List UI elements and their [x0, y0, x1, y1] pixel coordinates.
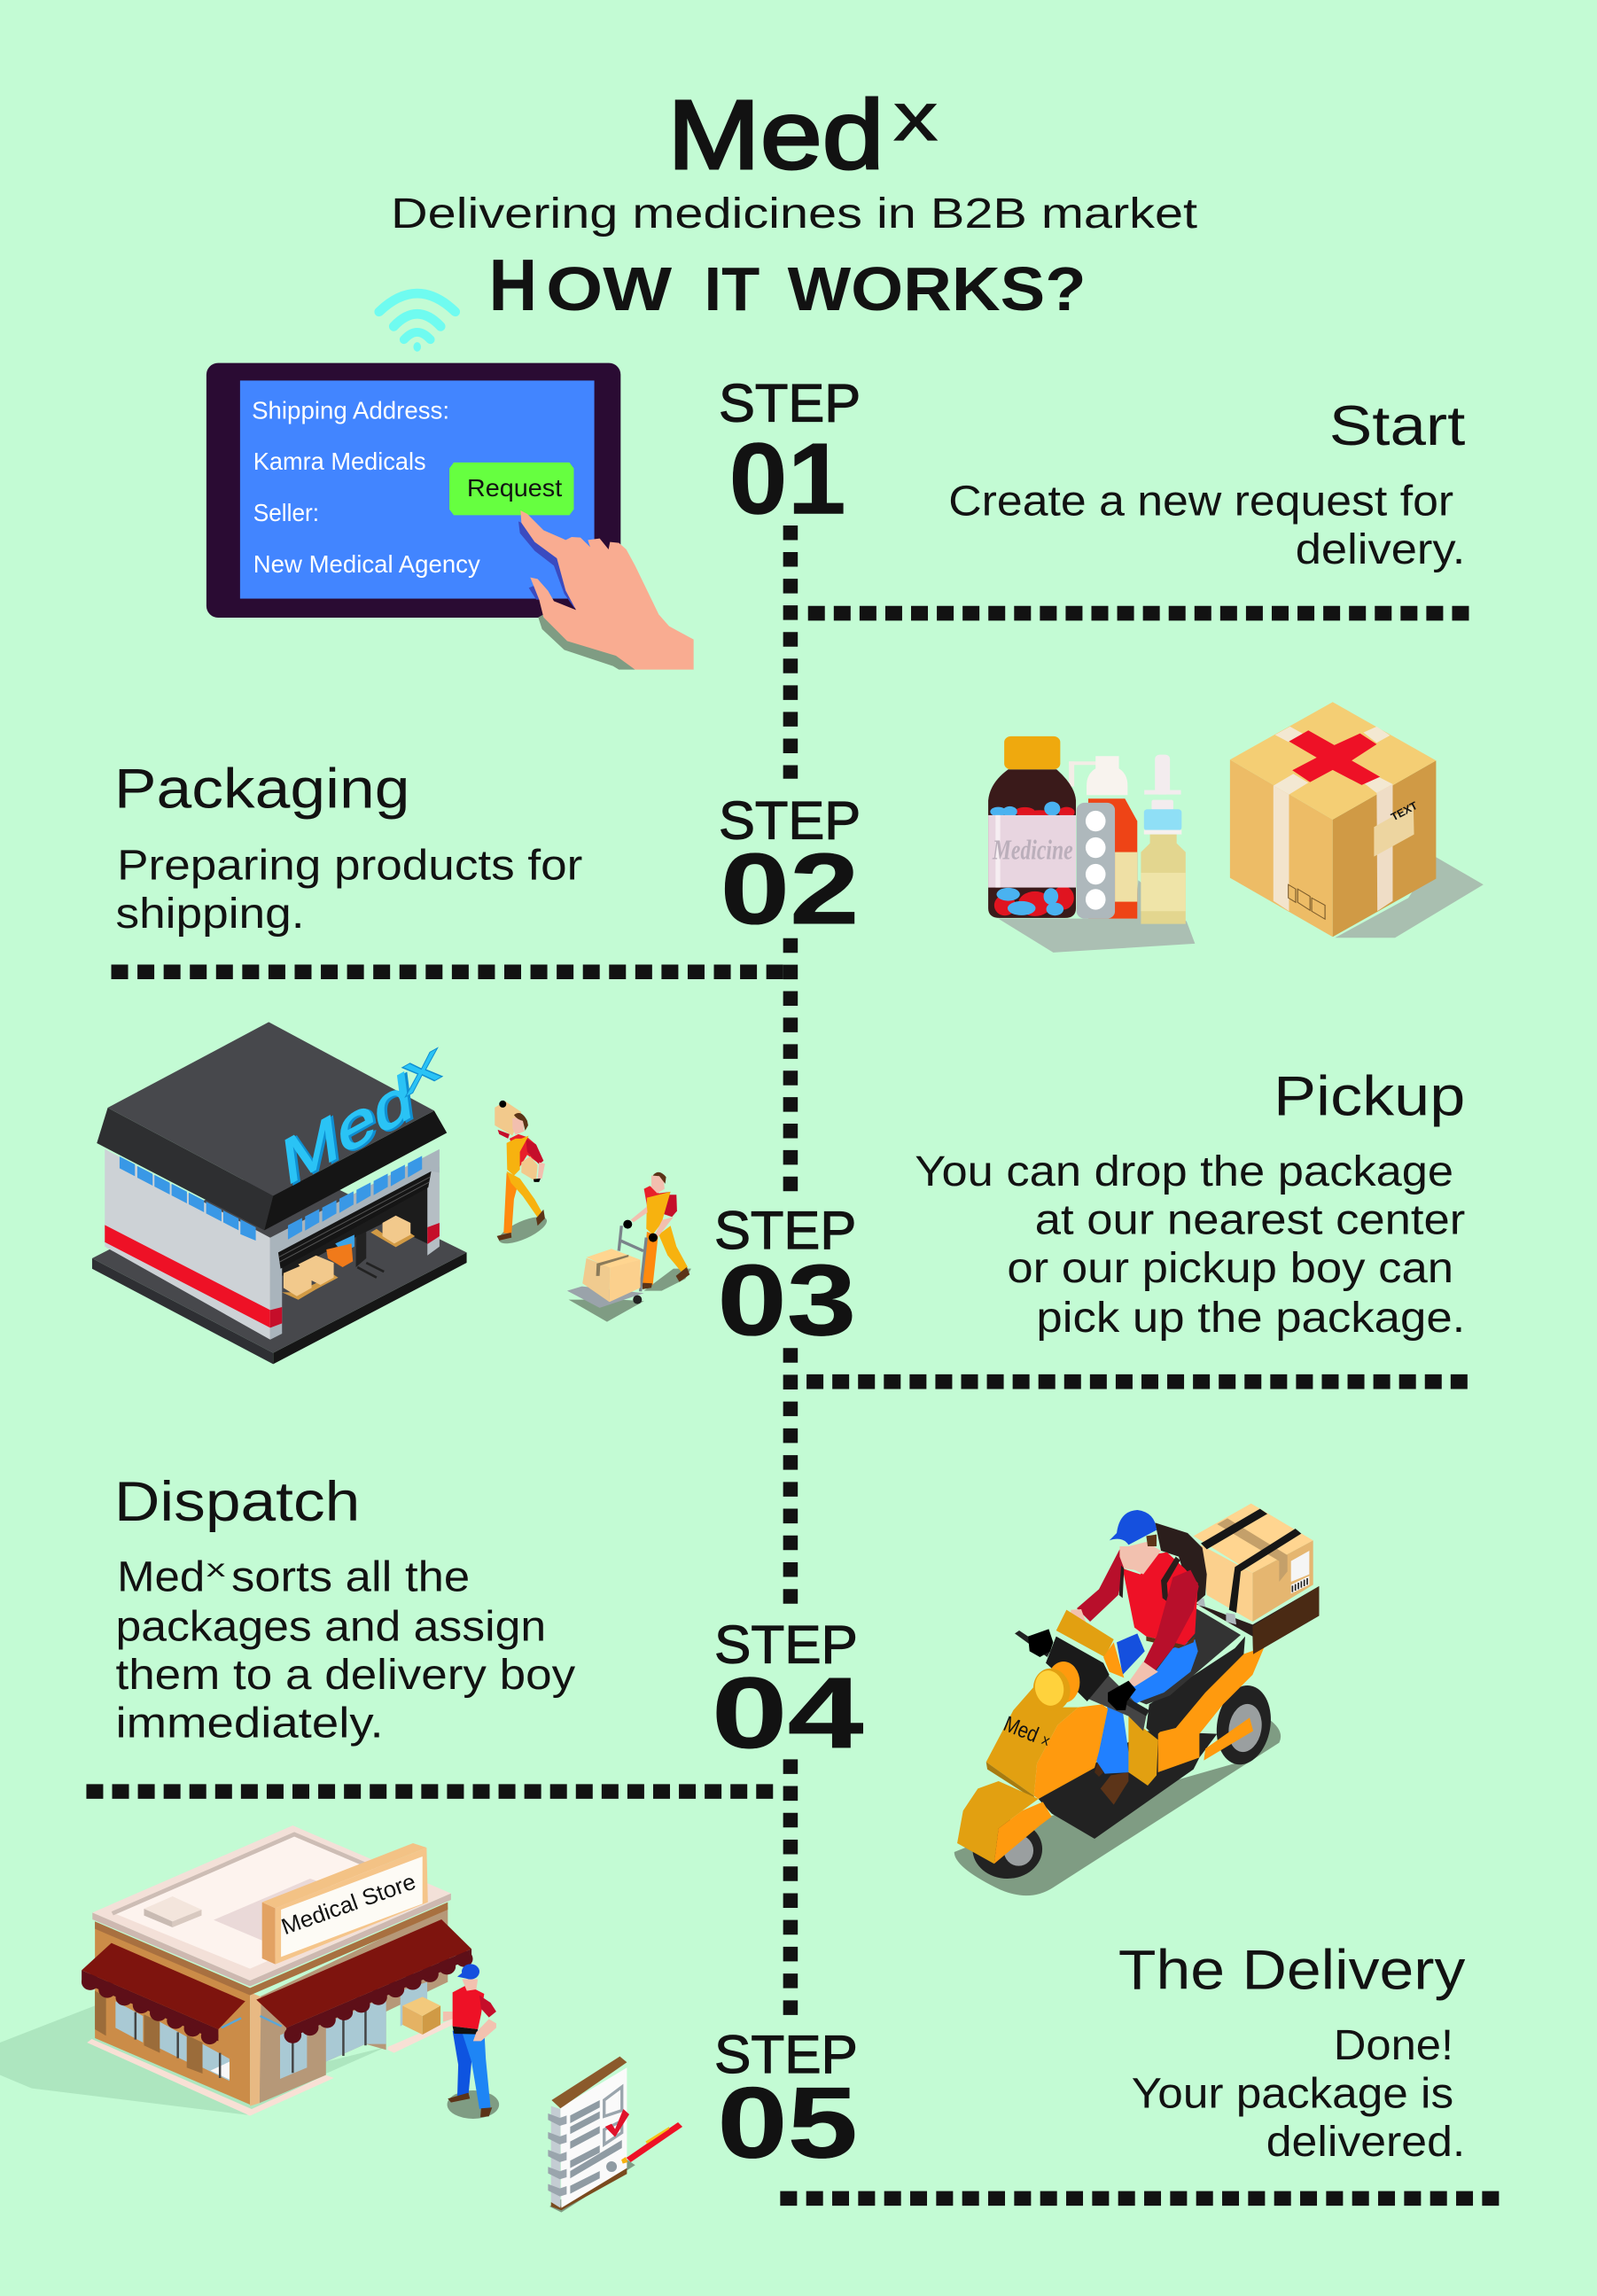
- text block: the delivery: [1118, 1940, 1466, 2166]
- illustration: delivery scooter: [954, 1504, 1319, 1895]
- illustration: delivery scooter: Med: [1001, 1712, 1041, 1747]
- text block: packaging: Packaging: [114, 759, 409, 821]
- text block: the delivery: The Delivery: [1118, 1940, 1466, 2002]
- front wheel: [972, 1819, 1042, 1879]
- illustration: customer with parcel: [402, 1964, 499, 2119]
- sign: Med neon text: Med: [278, 1060, 416, 1200]
- nasal spray: [1141, 755, 1186, 924]
- text block: dispatch: them to a delivery boy: [115, 1652, 575, 1699]
- text block: pickup: Pickup: [1274, 1066, 1465, 1128]
- rider: [1070, 1510, 1207, 1805]
- step 01 label: STEP: [719, 373, 861, 433]
- floor: [1039, 1731, 1217, 1839]
- text block: the delivery: Your package is: [1132, 2070, 1453, 2117]
- heading: how it works: [489, 245, 1087, 326]
- illustration: tablet with request form: Kamra Medicals: [253, 448, 426, 475]
- text block: start: delivery.: [1296, 526, 1465, 573]
- icon: pointing hand: [518, 510, 694, 670]
- button: request: Request: [467, 474, 562, 502]
- illustration: medicines: [988, 736, 1195, 953]
- forklift: [326, 1232, 384, 1278]
- illustration: tablet with request form: Seller:: [253, 499, 319, 526]
- step 05 label: 05: [717, 2067, 858, 2180]
- step 04 label: 04: [712, 1657, 864, 1770]
- sign: Med neon text: [278, 1027, 445, 1201]
- spray bottle: [1069, 756, 1137, 919]
- base: [87, 2039, 334, 2116]
- step 02 label: STEP: [719, 790, 861, 850]
- interior: [281, 1177, 428, 1276]
- dotted timeline: [86, 525, 1500, 2199]
- text block: dispatch: Dispatch: [114, 1471, 360, 1533]
- scooter fairing: [957, 1610, 1158, 1864]
- text block: dispatch: x: [206, 1554, 225, 1582]
- button: request: [449, 463, 573, 515]
- syrup bottle: [988, 736, 1076, 918]
- illustration: parcel box: TEXT: [1389, 799, 1420, 823]
- text block: the delivery: delivered.: [1266, 2119, 1465, 2166]
- step 05 label: [714, 2024, 858, 2180]
- illustration: worker carrying box: [495, 1101, 550, 1249]
- illustration: medical store: [0, 1825, 471, 2116]
- illustration: clipboard and pen: [548, 2057, 682, 2213]
- heading: how it works: IT: [704, 254, 760, 323]
- text block: start: [948, 395, 1465, 573]
- heading: how it works: OW: [546, 254, 673, 323]
- text block: dispatch: immediately.: [115, 1701, 384, 1747]
- illustration: delivery scooter: x: [1040, 1732, 1053, 1749]
- step 01 label: [719, 373, 861, 536]
- text block: packaging: Preparing products for: [117, 843, 582, 890]
- text block: the delivery: Done!: [1334, 2022, 1453, 2069]
- sign: Med neon text: Med: [281, 1061, 418, 1201]
- text block: pickup: pick up the package.: [1036, 1295, 1465, 1342]
- step 04 label: STEP: [714, 1614, 858, 1674]
- subtitle: Delivering medicines in B2B market: [391, 191, 1197, 237]
- heading: how it works: H: [489, 245, 537, 326]
- text block: dispatch: Med: [117, 1553, 205, 1600]
- text block: pickup: or our pickup boy can: [1007, 1245, 1453, 1292]
- illustration: medicines: Medicine: [992, 835, 1073, 866]
- text block: pickup: You can drop the package: [915, 1148, 1453, 1195]
- text block: packaging: [114, 759, 582, 938]
- walls: [95, 1921, 250, 2105]
- step 01 label: 01: [729, 424, 846, 536]
- clerestory windows: [288, 1156, 422, 1240]
- step 02 label: [719, 790, 861, 946]
- roof: [95, 1903, 448, 1996]
- illustration: parcel box: [1230, 702, 1484, 938]
- text block: packaging: shipping.: [115, 891, 305, 938]
- illustration: tablet with request form: [206, 363, 694, 670]
- title: Medx logo: x: [893, 80, 938, 155]
- text block: start: Start: [1329, 395, 1465, 457]
- text block: dispatch: sorts all the: [231, 1553, 470, 1600]
- roof: [97, 1108, 273, 1230]
- illustration: medical store: Medical Store: [278, 1870, 419, 1940]
- icon: wifi signal: [379, 293, 456, 352]
- seat: [1146, 1637, 1245, 1734]
- signboard: [262, 1903, 276, 1965]
- awnings: [90, 1982, 210, 2036]
- step 02 label: 02: [721, 833, 860, 946]
- step 03 label: STEP: [714, 1200, 856, 1260]
- illustration: tablet with request form: New Medical Agency: [253, 550, 480, 578]
- illustration: tablet with request form: Shipping Address:: [252, 396, 449, 424]
- heading: how it works: WORKS?: [788, 254, 1087, 323]
- rear wheel: [1211, 1681, 1277, 1769]
- text block: dispatch: [114, 1471, 575, 1747]
- step 04 label: [712, 1614, 864, 1770]
- illustration: warehouse: [92, 1022, 467, 1364]
- text block: pickup: at our nearest center: [1035, 1196, 1465, 1243]
- text block: pickup: [915, 1066, 1465, 1342]
- blister pack: [1077, 803, 1115, 919]
- illustration: worker with hand truck: [567, 1172, 691, 1322]
- delivery box: [1194, 1504, 1319, 1654]
- step 03 label: 03: [717, 1244, 856, 1357]
- pallets of boxes: [282, 1216, 415, 1300]
- text block: start: Create a new request for: [948, 478, 1453, 525]
- sign: Med neon text: x: [398, 1027, 445, 1109]
- text block: dispatch: packages and assign: [115, 1604, 546, 1651]
- step 05 label: STEP: [714, 2024, 858, 2084]
- step 03 label: [714, 1200, 856, 1357]
- shutter: [278, 1171, 432, 1269]
- title: Medx logo: Med: [667, 81, 884, 190]
